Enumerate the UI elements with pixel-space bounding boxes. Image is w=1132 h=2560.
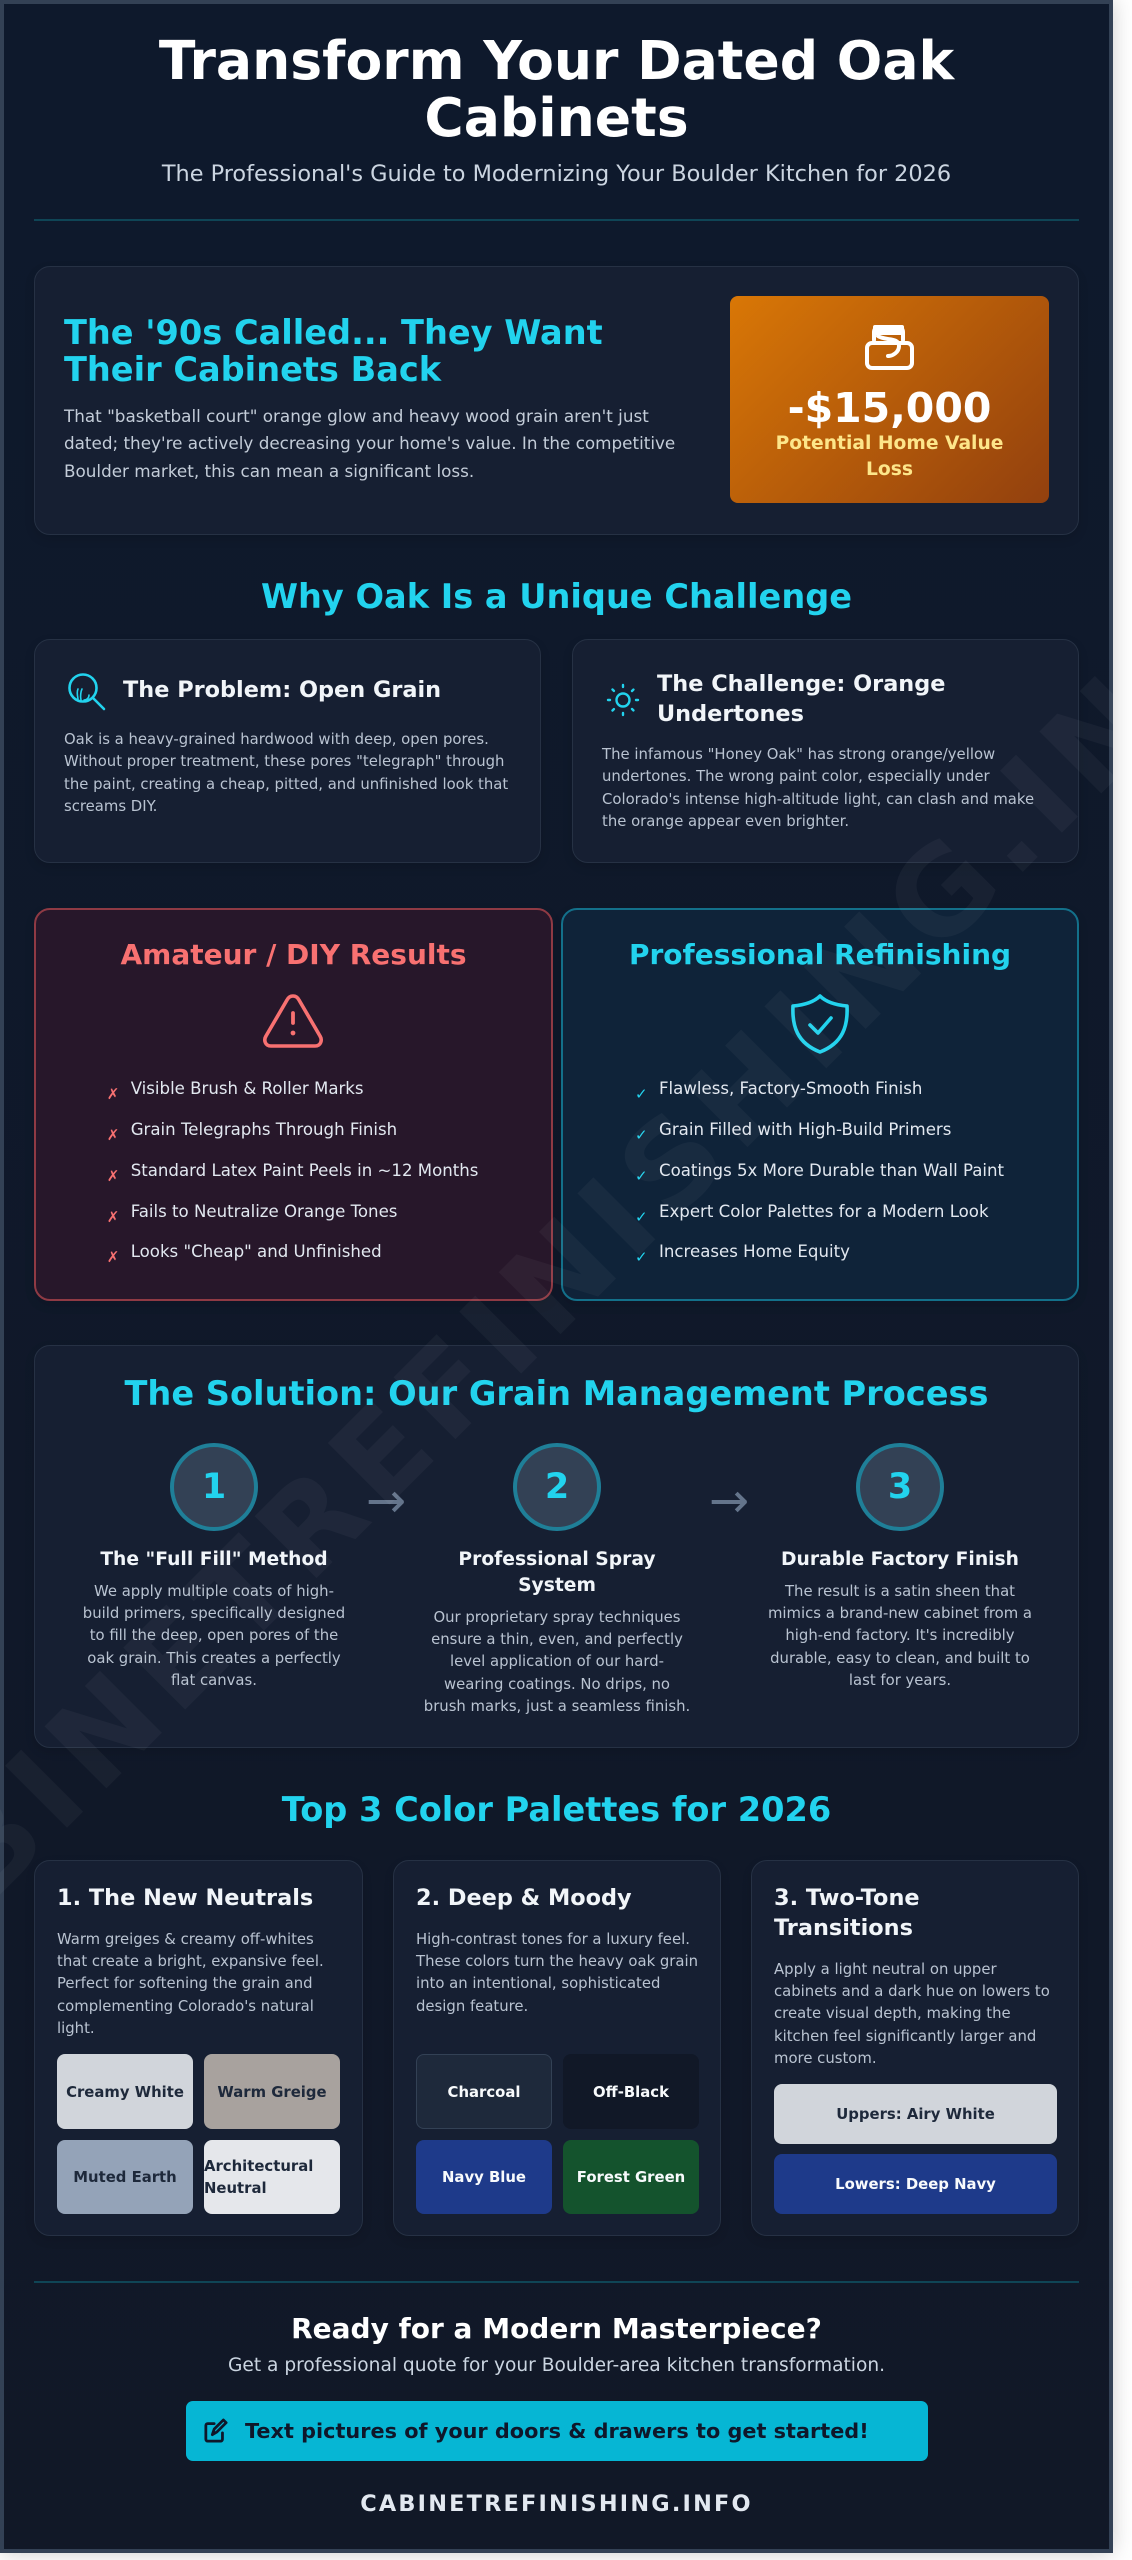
- palette text: kitchen feel significantly larger and: [774, 2027, 1036, 2045]
- number badge 1: [170, 1443, 258, 1531]
- panel: deep and moody palette: [393, 1860, 721, 2236]
- panel: two-tone palette: [751, 1860, 1079, 2236]
- palette title: 1. The New Neutrals: [57, 1885, 313, 1911]
- card text: the paint, creating a cheap, pitted, and unfinished look that: [64, 775, 508, 793]
- swatch: Neutral: [204, 2179, 267, 2197]
- swatch: [57, 2054, 193, 2129]
- subtitle: The Professional's Guide to Modernizing Your Boulder Kitchen for 2026: [162, 161, 951, 187]
- panel: hero: [34, 266, 1079, 535]
- heading: Amateur / DIY Results: [120, 938, 467, 971]
- step 2: [424, 1443, 690, 1715]
- loss caption: [776, 433, 1003, 480]
- arrow: →: [366, 1473, 406, 1529]
- button: text pictures: [186, 2401, 928, 2461]
- swatch: Lowers: Deep Navy: [835, 2175, 996, 2193]
- item: Standard Latex Paint Peels in ~12 Months: [131, 1161, 478, 1180]
- palette text: [57, 1930, 324, 2037]
- title: [159, 29, 956, 149]
- hero text: dated; they're actively decreasing your home's value. In the competitive: [64, 433, 675, 453]
- palette title: [774, 1885, 920, 1941]
- palette title: Transitions: [774, 1915, 913, 1941]
- heading: Professional Refinishing: [629, 938, 1011, 971]
- panel: professional refinishing: ✓: [635, 1248, 648, 1266]
- card title: The Problem: Open Grain: [123, 677, 441, 703]
- step 1 text: to fill the deep, open pores of the: [90, 1626, 338, 1644]
- item: Expert Color Palettes for a Modern Look: [659, 1202, 989, 1221]
- item: Looks "Cheap" and Unfinished: [131, 1242, 382, 1261]
- palette text: light.: [57, 2019, 95, 2037]
- item: Grain Filled with High-Build Primers: [659, 1120, 951, 1139]
- icon: shield check: [791, 994, 849, 1054]
- callout: home value loss: [730, 296, 1049, 503]
- step 3: [768, 1443, 1032, 1689]
- swatch: [774, 2084, 1057, 2144]
- panel: open grain problem: [34, 639, 541, 863]
- swatch: [774, 2154, 1057, 2214]
- panel: new neutrals palette: [34, 1860, 363, 2236]
- icon: money box: [865, 325, 914, 370]
- card text: The infamous "Honey Oak" has strong orange/yellow: [602, 745, 995, 763]
- step 3 title: Durable Factory Finish: [781, 1549, 1019, 1570]
- card title: Undertones: [657, 701, 804, 727]
- icon: edit: [204, 2418, 228, 2442]
- hero text: That "basketball court" orange glow and heavy wood grain aren't just: [64, 406, 649, 426]
- loss caption: Potential Home Value: [776, 433, 1003, 454]
- panel: professional refinishing: ✓: [635, 1126, 648, 1144]
- step 2 text: brush marks, just a seamless finish.: [424, 1697, 690, 1715]
- card text: Oak is a heavy-grained hardwood with deep, open pores.: [64, 730, 489, 748]
- panel: amateur DIY results: ✗: [107, 1167, 119, 1185]
- panel: amateur DIY results: ✗: [107, 1208, 119, 1226]
- step 1: [83, 1443, 345, 1689]
- step 2 text: [424, 1608, 690, 1715]
- swatch: Forest Green: [577, 2168, 685, 2186]
- hero text: [64, 406, 675, 481]
- swatch: [204, 2140, 340, 2214]
- palette text: create visual depth, making the: [774, 2004, 1011, 2022]
- step 1 text: build primers, specifically designed: [83, 1604, 345, 1622]
- step 3 text: high-end factory. It's incredibly: [785, 1626, 1015, 1644]
- palette text: into an intentional, sophisticated: [416, 1974, 660, 1992]
- swatch: Navy Blue: [442, 2168, 526, 2186]
- number badge 3: [856, 1443, 944, 1531]
- step 2 text: level application of our hard-: [450, 1652, 664, 1670]
- card text: Colorado's intense high-altitude light, can clash and make: [602, 790, 1034, 808]
- arrow: →: [709, 1473, 749, 1529]
- checklist: pro benefits: [635, 1079, 1004, 1266]
- item: Visible Brush & Roller Marks: [131, 1079, 364, 1098]
- call to action text: Get a professional quote for your Boulder-area kitchen transformation.: [228, 2355, 885, 2376]
- palette text: [416, 1930, 698, 2015]
- step 1 title: The "Full Fill" Method: [100, 1549, 328, 1570]
- swatch: Muted Earth: [73, 2168, 177, 2186]
- checklist: DIY problems: [107, 1079, 478, 1266]
- swatch: Charcoal: [448, 2082, 520, 2100]
- swatch: Creamy White: [66, 2082, 184, 2100]
- panel: orange undertones challenge: [572, 639, 1079, 863]
- item: Increases Home Equity: [659, 1242, 850, 1261]
- swatch: [563, 2054, 699, 2129]
- swatch: Off-Black: [593, 2082, 669, 2100]
- palette title: 2. Deep & Moody: [416, 1885, 632, 1911]
- icon: sun: [606, 684, 640, 716]
- card title: The Challenge: Orange: [657, 671, 945, 697]
- panel: amateur DIY results: [34, 908, 553, 1301]
- step 1 text: flat canvas.: [171, 1671, 257, 1689]
- panel: professional refinishing: ✓: [635, 1167, 648, 1185]
- step 3 text: mimics a brand-new cabinet from a: [768, 1604, 1032, 1622]
- card text: [64, 730, 508, 815]
- panel: amateur DIY results: ✗: [107, 1248, 119, 1266]
- step 3 text: [768, 1582, 1032, 1689]
- card text: Without proper treatment, these pores "telegraph" through: [64, 752, 504, 770]
- number badge 1: 1: [202, 1467, 226, 1507]
- hero heading: [64, 313, 603, 389]
- swatch: [204, 2054, 340, 2129]
- palette text: [774, 1960, 1050, 2067]
- step 2 text: wearing coatings. No drips, no: [444, 1675, 670, 1693]
- step 3 text: The result is a satin sheen that: [785, 1582, 1015, 1600]
- hero heading: The '90s Called... They Want: [64, 313, 603, 352]
- step 2 text: ensure a thin, even, and perfectly: [431, 1630, 683, 1648]
- step 1 text: [83, 1582, 345, 1689]
- panel: professional refinishing: ✓: [635, 1085, 648, 1103]
- card title: [657, 671, 945, 727]
- palette text: High-contrast tones for a luxury feel.: [416, 1930, 690, 1948]
- title: Transform Your Dated Oak: [159, 29, 954, 92]
- section heading: palettes: Top 3 Color Palettes for 2026: [282, 1790, 831, 1829]
- palette text: design feature.: [416, 1997, 528, 2015]
- swatch: [416, 2054, 552, 2129]
- swatch: [416, 2140, 552, 2214]
- panel: amateur DIY results: ✗: [107, 1085, 119, 1103]
- step 2 title: System: [518, 1575, 596, 1596]
- palette text: Apply a light neutral on upper: [774, 1960, 997, 1978]
- palette text: cabinets and a dark hue on lowers to: [774, 1982, 1050, 2000]
- panel: amateur DIY results: ✗: [107, 1126, 119, 1144]
- panel: grain management process: [34, 1345, 1079, 1748]
- hero heading: Their Cabinets Back: [64, 350, 441, 389]
- step 3 text: durable, easy to clean, and built to: [770, 1649, 1030, 1667]
- swatch: [563, 2140, 699, 2214]
- step 3 text: last for years.: [849, 1671, 951, 1689]
- hero text: Boulder market, this can mean a significant loss.: [64, 461, 474, 481]
- step 2 text: Our proprietary spray techniques: [433, 1608, 681, 1626]
- palette text: more custom.: [774, 2049, 877, 2067]
- card text: [602, 745, 1034, 830]
- step 2 title: [458, 1549, 656, 1596]
- button label: Text pictures of your doors & drawers to get started!: [245, 2419, 869, 2443]
- step 2 title: Professional Spray: [458, 1549, 656, 1570]
- palette text: that create a bright, expansive feel.: [57, 1952, 324, 1970]
- panel: professional refinishing: [561, 908, 1079, 1301]
- palette text: Perfect for softening the grain and: [57, 1974, 313, 1992]
- section heading: why oak: Why Oak Is a Unique Challenge: [261, 577, 852, 616]
- step 1 text: oak grain. This creates a perfectly: [87, 1649, 341, 1667]
- swatch: Warm Greige: [217, 2082, 327, 2100]
- number badge 2: 2: [545, 1467, 569, 1507]
- card text: undertones. The wrong paint color, especially under: [602, 767, 990, 785]
- title: Cabinets: [424, 86, 689, 149]
- panel: professional refinishing: ✓: [635, 1208, 648, 1226]
- palette text: Warm greiges & creamy off-whites: [57, 1930, 314, 1948]
- palette title: 3. Two-Tone: [774, 1885, 920, 1911]
- number badge 2: [513, 1443, 601, 1531]
- icon: magnifier: [68, 673, 106, 710]
- process heading: The Solution: Our Grain Management Process: [125, 1374, 988, 1413]
- loss caption: Loss: [866, 459, 913, 480]
- icon: warning triangle: [263, 994, 323, 1048]
- swatch: Uppers: Airy White: [836, 2105, 995, 2123]
- swatch: Architectural: [204, 2157, 313, 2175]
- palette text: complementing Colorado's natural: [57, 1997, 314, 2015]
- card text: the orange appear even brighter.: [602, 812, 849, 830]
- swatch: [57, 2140, 193, 2214]
- step 1 text: We apply multiple coats of high-: [94, 1582, 334, 1600]
- number badge 3: 3: [888, 1467, 912, 1507]
- palette text: These colors turn the heavy oak grain: [416, 1952, 698, 1970]
- item: Flawless, Factory-Smooth Finish: [659, 1079, 922, 1098]
- item: Coatings 5x More Durable than Wall Paint: [659, 1161, 1004, 1180]
- big loss figure: -$15,000: [788, 384, 991, 432]
- card text: screams DIY.: [64, 797, 157, 815]
- footer brand: CABINETREFINISHING.INFO: [360, 2491, 753, 2517]
- call to action heading: Ready for a Modern Masterpiece?: [291, 2312, 822, 2345]
- item: Grain Telegraphs Through Finish: [131, 1120, 397, 1139]
- item: Fails to Neutralize Orange Tones: [131, 1202, 397, 1221]
